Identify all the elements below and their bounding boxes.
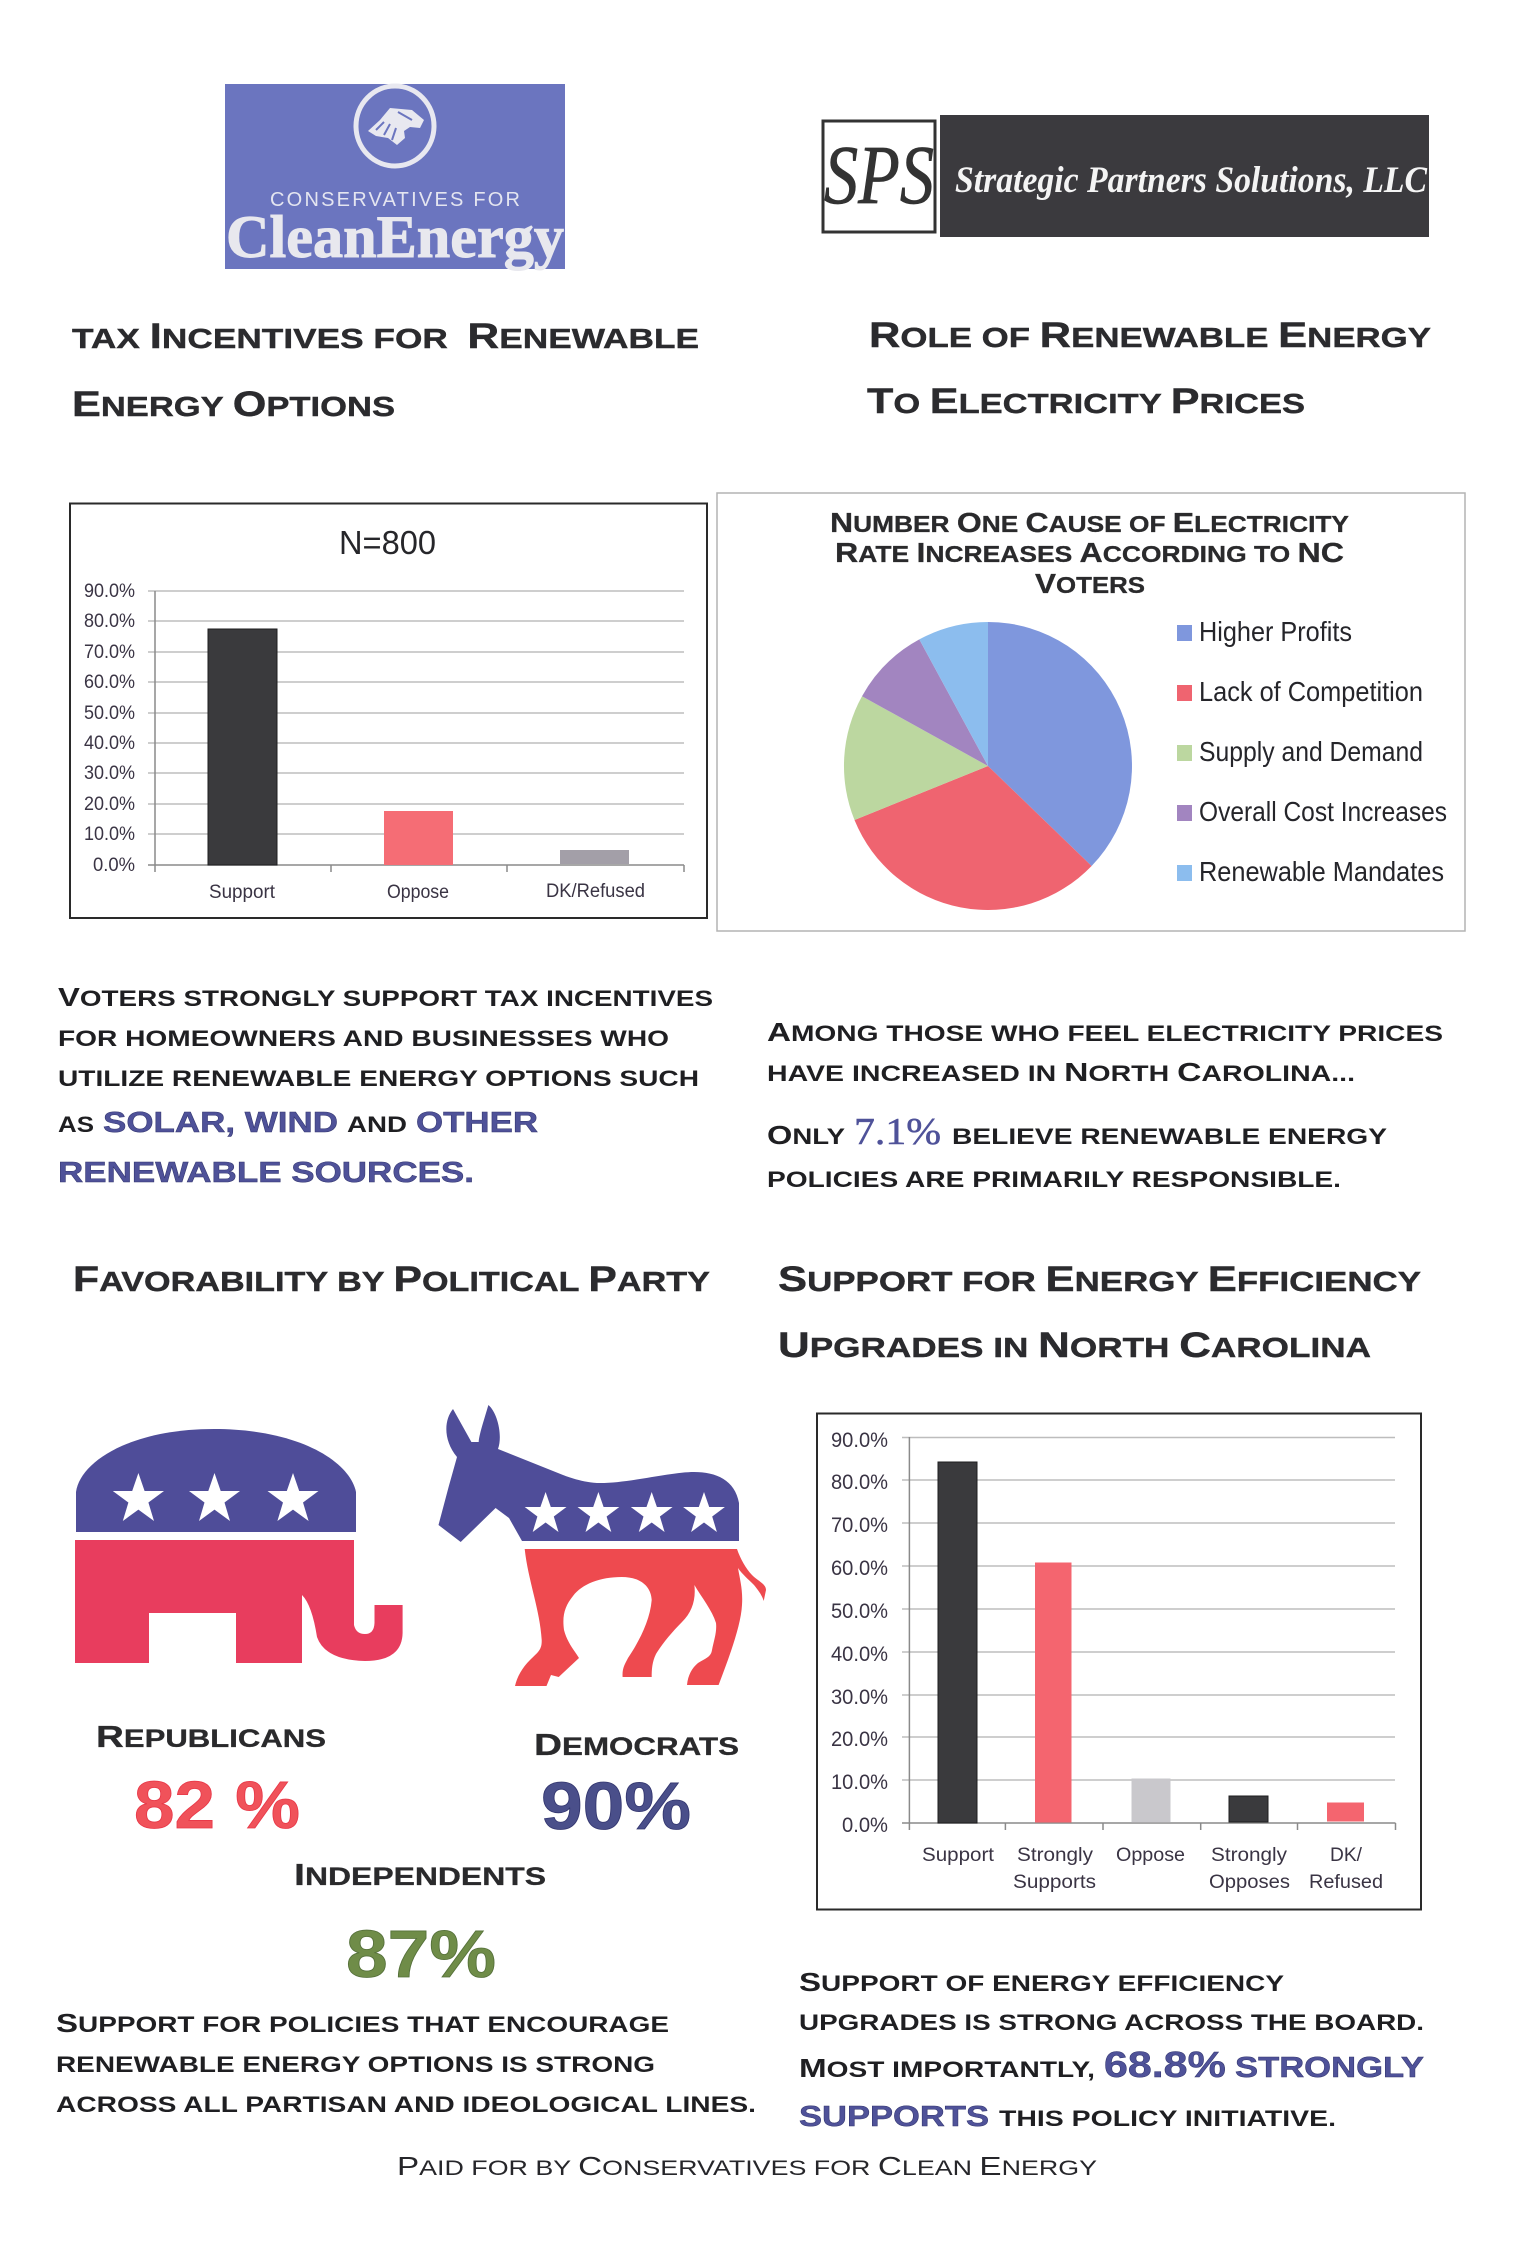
logo: Strategic Partners Solutions: SPS	[824, 129, 934, 222]
pie	[844, 622, 1132, 910]
text block: among those who feel: POLICIES ARE PRIMARILY RESPONSIBLE.	[767, 1167, 1341, 1192]
stat: republicans 82%	[96, 1719, 326, 1843]
category labels: DK/Refused	[546, 881, 645, 902]
text block: support for policies: RENEWABLE ENERGY OPTIONS IS STRONG	[56, 2052, 655, 2077]
bars	[938, 1462, 1364, 1823]
pie title: VOTERS	[1035, 568, 1145, 599]
legend: Supply and Demand	[1199, 736, 1423, 767]
category labels: Oppose	[387, 882, 449, 903]
text block: voters strongly support: RENEWABLE SOURCES.	[58, 1157, 474, 1189]
heading: favorability by political party: FAVORABILITY BY POLITICAL PARTY	[73, 1260, 710, 1299]
heading: tax incentives: ENERGY OPTIONS	[72, 385, 395, 424]
y axis labels: 20.0%	[831, 1728, 888, 1751]
stat: democrats 90%: DEMOCRATS	[534, 1727, 739, 1762]
y axis labels: 70.0%	[84, 642, 135, 663]
y axis labels: 50.0%	[84, 703, 135, 724]
text block: support of energy efficiency: THIS POLICY INITIATIVE.	[999, 2106, 1336, 2131]
y axis labels: 40.0%	[831, 1643, 888, 1666]
text block: voters strongly support: FOR HOMEOWNERS AND BUSINESSES WHO	[58, 1026, 669, 1051]
legend: Renewable Mandates	[1199, 856, 1444, 887]
pie title: RATE INCREASES ACCORDING TO NC	[835, 537, 1344, 568]
category labels	[209, 881, 645, 903]
stat: democrats 90%: 90%	[541, 1769, 691, 1844]
text block: support of energy efficiency	[799, 1967, 1424, 2133]
y axis labels: 60.0%	[831, 1557, 888, 1580]
pie chart panel: number one cause	[717, 493, 1465, 931]
text block: among those who feel: HAVE INCREASED IN N ORTH C AROLINA...	[767, 1057, 1355, 1087]
category labels: DK/	[1330, 1845, 1363, 1866]
logo: Strategic Partners Solutions: Strategic Partners Solutions, LLC	[955, 160, 1428, 201]
text block: voters strongly support: SOLAR, WIND	[103, 1107, 338, 1139]
pie title: NUMBER ONE CAUSE OF ELECTRICITY	[830, 507, 1349, 538]
legend	[1177, 616, 1447, 887]
text block: voters strongly support: AS	[58, 1112, 94, 1137]
heading: tax incentives: TAX INCENTIVES FOR RENEWABLE	[72, 317, 699, 356]
heading: tax incentives	[72, 317, 699, 424]
text block: among those who feel: 7.1%	[854, 1111, 941, 1153]
bars	[208, 629, 629, 865]
legend: Overall Cost Increases	[1199, 796, 1447, 827]
icon: eagle in circle	[356, 86, 434, 166]
heading: role of renewable energy: ROLE OF RENEWABLE ENERGY	[869, 316, 1431, 355]
category labels: Support	[209, 882, 276, 903]
bar chart: tax incentives N=800	[70, 504, 707, 918]
text block: support for policies	[56, 2008, 756, 2117]
text block: voters strongly support: AND	[347, 1112, 407, 1137]
y axis labels: 60.0%	[84, 672, 135, 693]
stat: democrats 90%	[534, 1727, 739, 1844]
category labels: Opposes	[1209, 1872, 1290, 1893]
y axis labels: 0.0%	[93, 855, 135, 876]
y axis labels: 40.0%	[84, 733, 135, 754]
logo: Strategic Partners Solutions	[823, 115, 1429, 237]
y axis labels	[831, 1429, 888, 1837]
y axis labels: 90.0%	[831, 1429, 888, 1452]
category labels: Supports	[1013, 1872, 1096, 1893]
text block: support for policies: SUPPORT FOR POLICIES THAT ENCOURAGE	[56, 2008, 669, 2038]
text block: voters strongly support: VOTERS STRONGLY SUPPORT TAX INCENTIVES	[58, 982, 713, 1012]
chart title: N=800	[339, 524, 436, 561]
heading: role of renewable energy	[867, 316, 1431, 421]
stat: independents 87%: INDEPENDENTS	[294, 1857, 546, 1892]
y axis labels: 30.0%	[831, 1686, 888, 1709]
legend: Lack of Competition	[1199, 676, 1423, 707]
pie title	[830, 507, 1349, 599]
stat: republicans 82%: REPUBLICANS	[96, 1719, 326, 1754]
heading: support for energy efficiency: SUPPORT FOR ENERGY EFFICIENCY	[778, 1260, 1421, 1299]
text block: support of energy efficiency: UPGRADES IS STRONG ACROSS THE BOARD.	[799, 2010, 1424, 2035]
y axis labels: 10.0%	[84, 824, 135, 845]
y axis labels	[84, 581, 135, 876]
icon: republican elephant	[75, 1429, 403, 1663]
text block: support of energy efficiency: 68.8% STRONGLY	[1104, 2044, 1424, 2085]
text block: voters strongly support: UTILIZE RENEWABLE ENERGY OPTIONS SUCH	[58, 1066, 699, 1091]
category labels: Support	[922, 1845, 995, 1866]
y axis labels: 80.0%	[831, 1471, 888, 1494]
y axis labels: 10.0%	[831, 1771, 888, 1794]
icon: democratic donkey	[438, 1405, 766, 1686]
text block: voters strongly support	[58, 982, 713, 1189]
footer: paid for by: PAID FOR BY CONSERVATIVES FOR CLEAN ENERGY	[397, 2151, 1097, 2181]
logo: Conservatives for Clean Energy	[225, 84, 565, 270]
text block: voters strongly support: OTHER	[416, 1107, 538, 1139]
category labels: Strongly	[1017, 1845, 1094, 1866]
category labels: Oppose	[1116, 1845, 1185, 1866]
category labels: Refused	[1309, 1872, 1383, 1893]
logo: Conservatives for Clean Energy: CONSERVATIVES FOR	[270, 189, 520, 211]
text block: among those who feel: AMONG THOSE WHO FEEL ELECTRICITY PRICES	[767, 1017, 1443, 1047]
text block: among those who feel: BELIEVE RENEWABLE ENERGY	[952, 1124, 1387, 1149]
text block: among those who feel	[767, 1017, 1443, 1192]
text block: support of energy efficiency: SUPPORTS	[799, 2101, 989, 2133]
stat: republicans 82%: 82 %	[134, 1768, 300, 1843]
text block: support of energy efficiency: SUPPORT OF ENERGY EFFICIENCY	[799, 1967, 1284, 1997]
bar chart: energy efficiency upgrades	[817, 1414, 1421, 1910]
heading: role of renewable energy: TO ELECTRICITY PRICES	[867, 382, 1305, 421]
y axis labels: 30.0%	[84, 763, 135, 784]
y axis labels: 0.0%	[842, 1814, 888, 1837]
y axis labels: 70.0%	[831, 1514, 888, 1537]
heading: support for energy efficiency: UPGRADES IN NORTH CAROLINA	[778, 1326, 1371, 1365]
heading: support for energy efficiency	[778, 1260, 1421, 1365]
y axis labels: 20.0%	[84, 794, 135, 815]
legend: Higher Profits	[1199, 616, 1352, 647]
stat: independents 87%: 87%	[346, 1917, 496, 1992]
category labels	[922, 1845, 1383, 1893]
text block: support for policies: ACROSS ALL PARTISAN AND IDEOLOGICAL LINES.	[56, 2092, 756, 2117]
text block: among those who feel: ONLY	[767, 1120, 845, 1150]
stat: independents 87%	[294, 1857, 546, 1992]
y axis labels: 80.0%	[84, 611, 135, 632]
logo: Conservatives for Clean Energy: CleanEnergy	[226, 204, 564, 270]
text block: support of energy efficiency: M OST IMPORTANTLY,	[799, 2053, 1095, 2083]
y axis labels: 90.0%	[84, 581, 135, 602]
category labels: Strongly	[1211, 1845, 1288, 1866]
y axis labels: 50.0%	[831, 1600, 888, 1623]
